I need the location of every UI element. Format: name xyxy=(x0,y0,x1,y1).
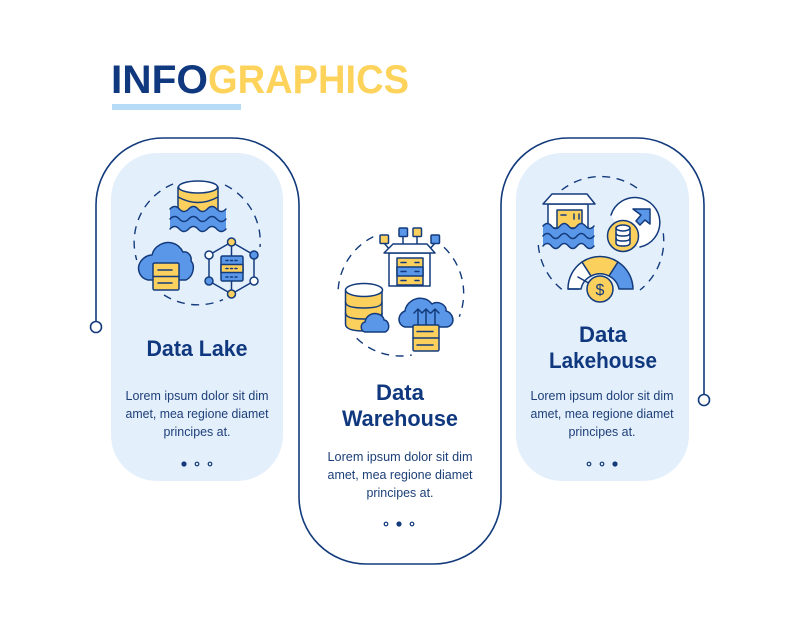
heading: Data Warehouse xyxy=(342,380,458,431)
text: Data Warehouse description: Lorem ipsum dolor sit dim xyxy=(328,450,472,464)
title xyxy=(111,58,409,102)
icon: data lakehouse: $ xyxy=(596,282,605,299)
text: Data Lake description: Lorem ipsum dolor sit dim xyxy=(126,389,268,403)
heading: Data Warehouse: Data xyxy=(376,380,425,405)
outline start marker xyxy=(90,322,102,332)
heading: Data Lakehouse xyxy=(549,322,657,373)
heading: Data Warehouse: Warehouse xyxy=(342,406,458,431)
text: Data Lake description xyxy=(126,389,269,439)
panel: left card background xyxy=(111,153,283,481)
text: Data Lake description: amet, mea regione diamet xyxy=(126,407,269,421)
text: Data Lake description: principes at. xyxy=(164,425,230,439)
heading: Data Lake: Data Lake xyxy=(146,336,248,361)
text: Data Lakehouse description xyxy=(530,389,674,439)
text: Data Lakehouse description: principes at. xyxy=(568,425,636,439)
connected panel outline xyxy=(96,138,704,564)
outline end marker xyxy=(698,394,710,406)
text: Data Warehouse description: principes at. xyxy=(366,486,434,500)
pagination dots: left xyxy=(182,462,212,466)
title: INFO xyxy=(111,58,208,102)
icon: data lakehouse xyxy=(538,177,664,302)
text: Data Warehouse description xyxy=(328,450,473,500)
icon: data lake xyxy=(134,181,260,305)
title underline xyxy=(112,104,241,110)
text: Data Warehouse description: amet, mea regione diamet xyxy=(328,468,473,482)
panel: right card background xyxy=(516,153,689,481)
heading: Data Lakehouse: Data xyxy=(579,322,628,347)
text: Data Lakehouse description: Lorem ipsum dolor sit dim xyxy=(530,389,674,403)
icon: data warehouse xyxy=(338,228,464,356)
pagination dots: right xyxy=(587,462,617,466)
text: Data Lakehouse description: amet, mea regione diamet xyxy=(530,407,674,421)
heading: Data Lakehouse: Lakehouse xyxy=(549,348,657,373)
title: GRAPHICS xyxy=(208,58,409,102)
pagination dots: middle xyxy=(384,522,414,526)
